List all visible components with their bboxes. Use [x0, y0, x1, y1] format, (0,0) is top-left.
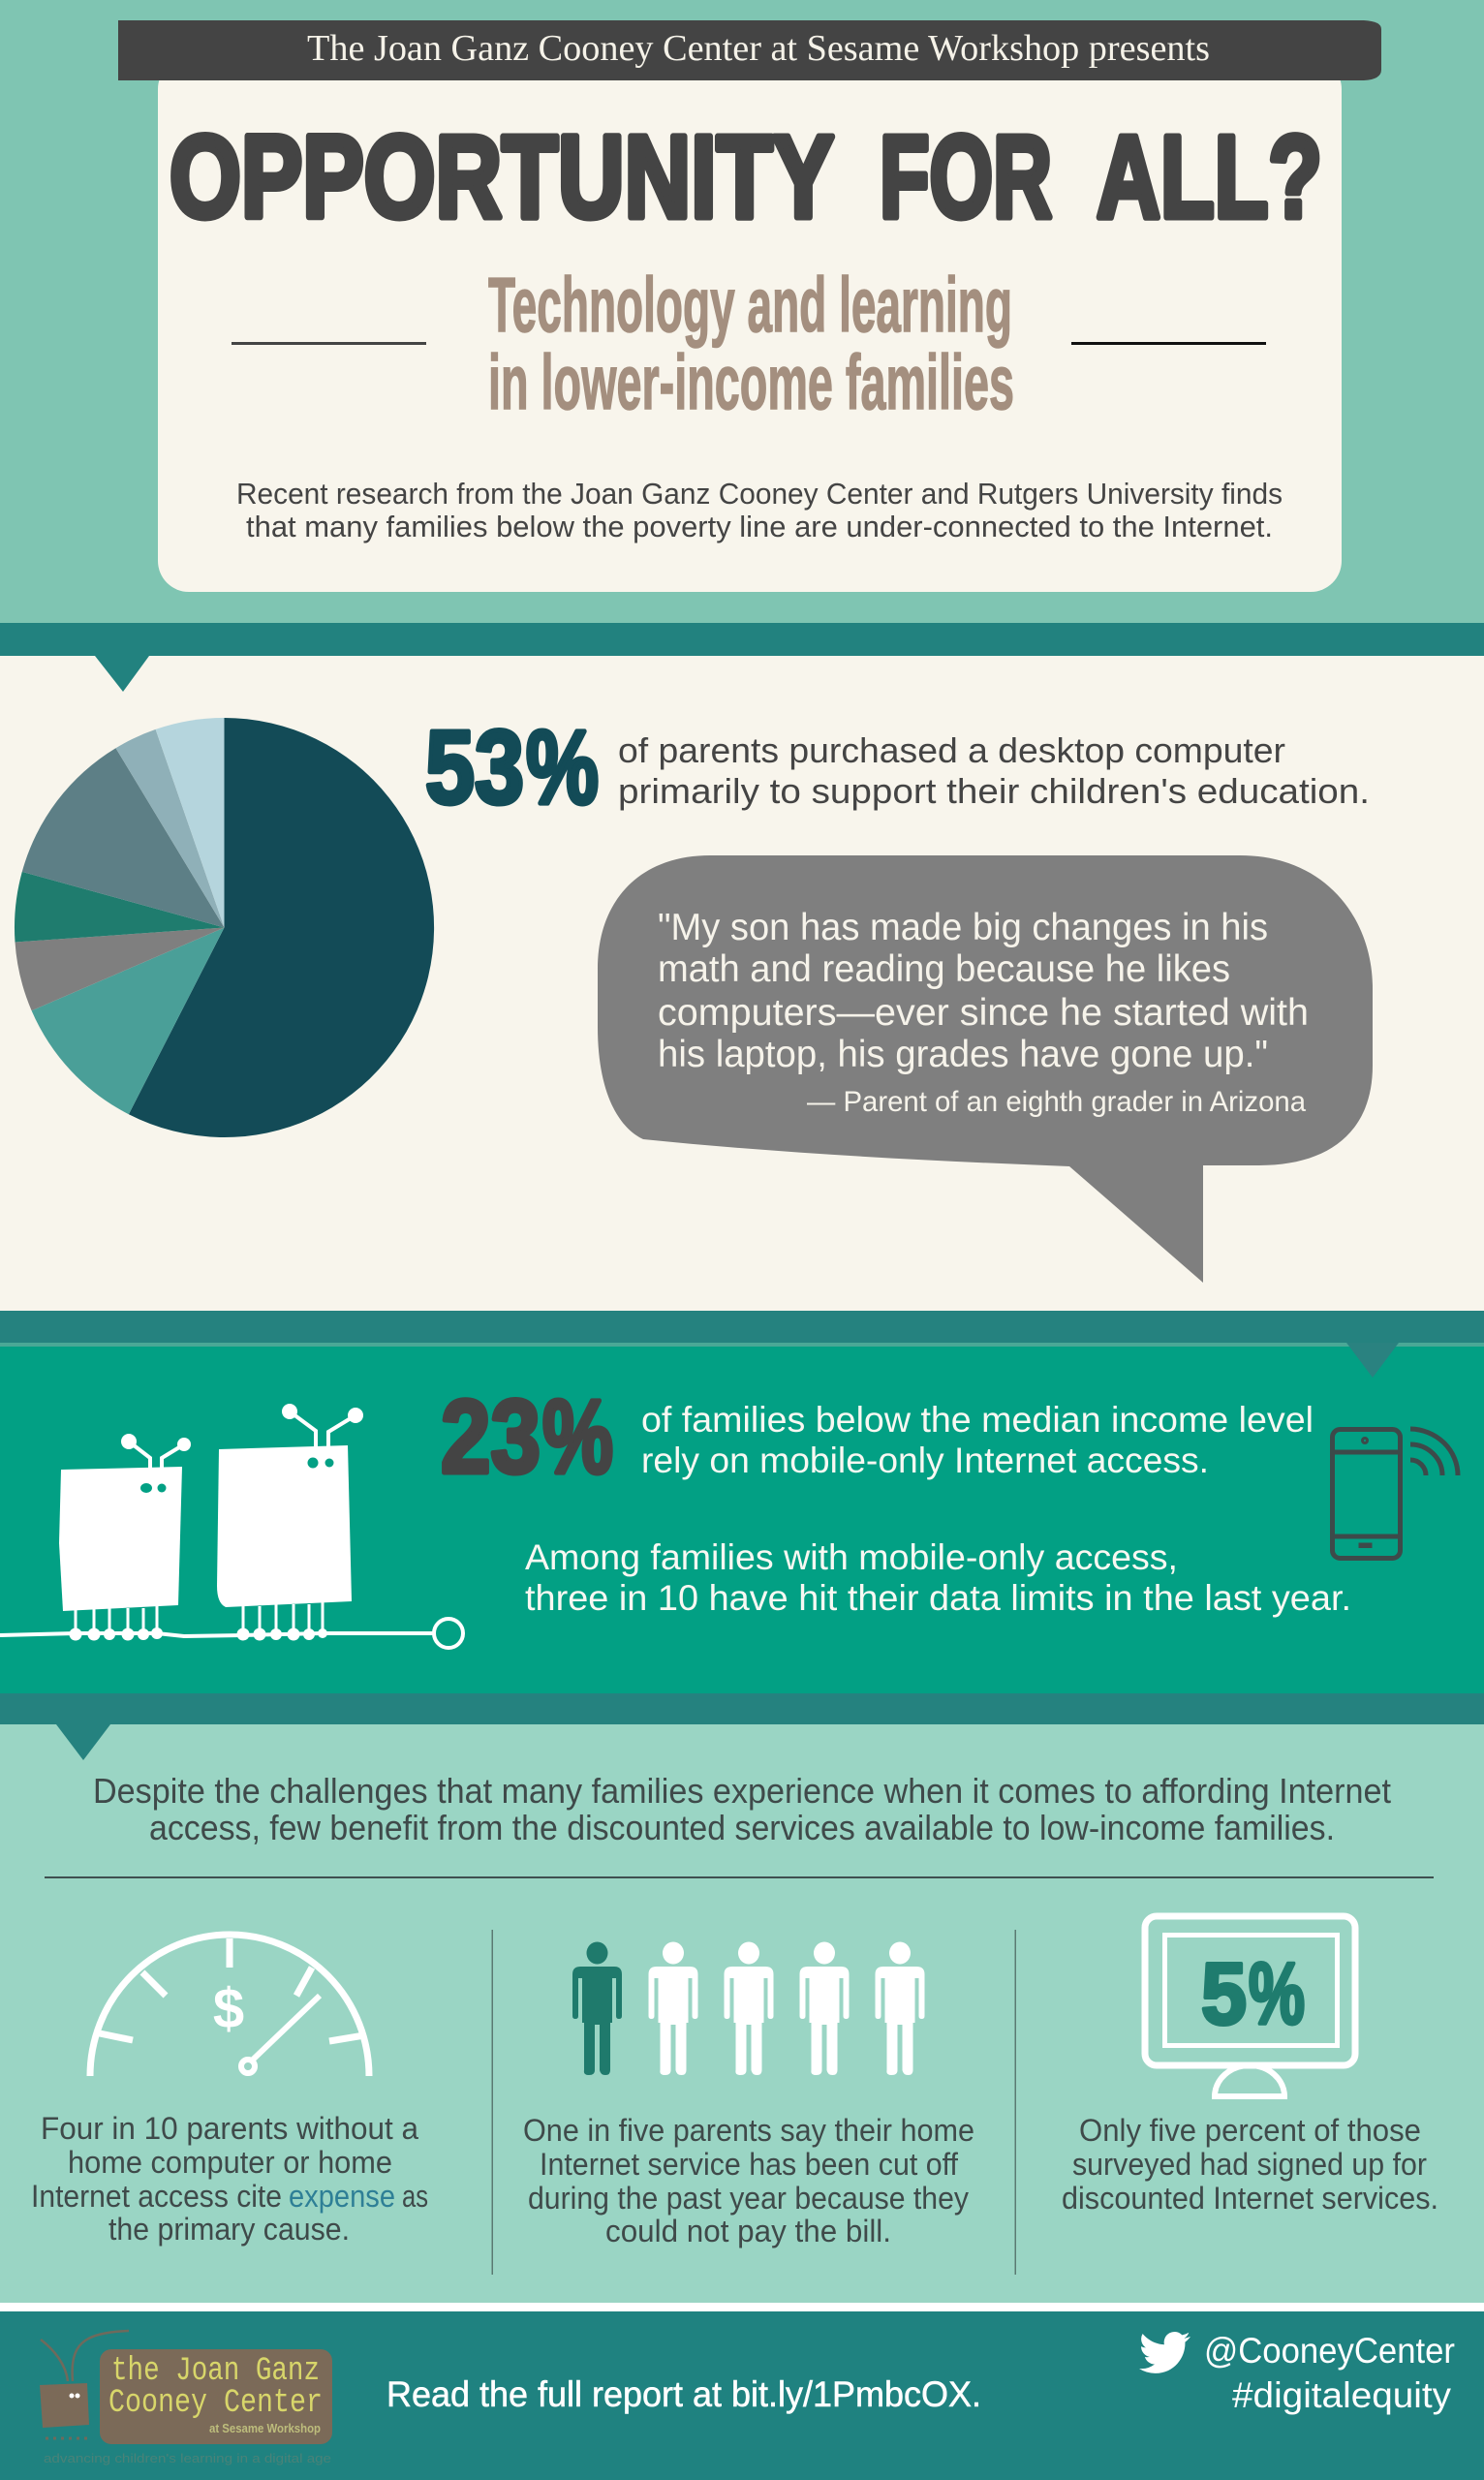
column 3 text: surveyed had signed up for [1072, 2147, 1427, 2182]
column 1 text: as [402, 2179, 428, 2214]
panel: desktop statistic [0, 656, 1484, 1312]
column 1 text: Internet access cite [31, 2179, 282, 2214]
pointer [1346, 1343, 1399, 1378]
logo: the Joan Ganz [111, 2353, 320, 2390]
column 1 text: home computer or home [68, 2145, 392, 2180]
statistic text [618, 730, 1370, 811]
section intro text: Despite the challenges that many families experience when it comes to affording Internet [93, 1771, 1391, 1811]
icon: expense gauge: $ [213, 1977, 244, 2040]
panel: mobile statistic [0, 1311, 1484, 1693]
person white [649, 1941, 697, 2075]
column 2 text: during the past year because they [528, 2181, 969, 2216]
intro text: Recent research from the Joan Ganz Cooney Center and Rutgers University finds [236, 477, 1283, 511]
mobile statistic text: three in 10 have hit their data limits in the last year. [525, 1578, 1351, 1618]
column 2 text: Internet service has been cut off [540, 2147, 958, 2182]
title: FOR [880, 110, 1052, 242]
social handles: @CooneyCenter [1204, 2331, 1455, 2371]
quote text: his laptop, his grades have gone up." [658, 1034, 1268, 1075]
big number 23%: 23 [441, 1378, 541, 1495]
title: ALL? [1097, 110, 1322, 242]
subtitle [488, 262, 1014, 425]
icon: twitter bird [1139, 2332, 1190, 2373]
person white [876, 1941, 924, 2075]
column 1 text: the primary cause. [108, 2212, 350, 2247]
pointer: first section [0, 623, 1484, 692]
column 3 text: discounted Internet services. [1062, 2181, 1438, 2216]
person white [725, 1941, 773, 2075]
logo: at Sesame Workshop [209, 2421, 321, 2435]
column 2 text: could not pay the bill. [605, 2214, 891, 2248]
icon: row of five people [572, 1941, 924, 2075]
quote text: — Parent of an eighth grader in Arizona [807, 1086, 1306, 1118]
statistic text: primarily to support their children's education. [618, 771, 1370, 811]
quote text: computers—ever since he started with [658, 992, 1309, 1034]
pointer [56, 1724, 110, 1760]
intro text: that many families below the poverty line are under-connected to the Internet. [246, 510, 1273, 543]
logo: advancing children's learning in a digital age [44, 2451, 331, 2465]
statistic text: of parents purchased a desktop computer [618, 730, 1285, 770]
big number 53%: 53 [425, 708, 524, 825]
logo robot icon [40, 2331, 129, 2438]
subtitle: in lower-income families [488, 339, 1014, 425]
big number 53%: % [526, 708, 599, 825]
big number 23%: % [542, 1378, 613, 1495]
panel: footer [0, 2311, 1484, 2480]
quote text [658, 907, 1309, 1118]
panel: discounted services [0, 1693, 1484, 2303]
robots illustration [0, 1404, 463, 1648]
big number 53% [425, 708, 599, 825]
title: OPPORTUNITY [170, 110, 834, 242]
speech bubble quote [598, 855, 1373, 1283]
icon: monitor showing 5%: 5 [1201, 1946, 1247, 2043]
column 1 text: Four in 10 parents without a [41, 2111, 418, 2146]
mobile statistic text: Among families with mobile-only access, [525, 1537, 1178, 1577]
social handles: #digitalequity [1232, 2375, 1452, 2415]
column 1 text [31, 2111, 428, 2247]
big number 23% [441, 1378, 613, 1495]
mobile statistic text: rely on mobile-only Internet access. [641, 1441, 1209, 1480]
icon: monitor showing 5%: % [1249, 1946, 1305, 2043]
subtitle: Technology and learning [488, 262, 1012, 348]
column 2 text: One in five parents say their home [523, 2113, 974, 2148]
column 2 text [523, 2113, 974, 2248]
section intro text [93, 1771, 1391, 1847]
mobile statistic text [525, 1400, 1351, 1618]
person white [800, 1941, 849, 2075]
banner text: The Joan Ganz Cooney Center at Sesame Workshop presents [307, 28, 1210, 69]
pie chart [15, 718, 434, 1137]
social handles [1204, 2331, 1455, 2415]
quote text: "My son has made big changes in his [658, 907, 1268, 948]
section intro text: access, few benefit from the discounted services available to low-income families. [149, 1808, 1335, 1847]
quote text: math and reading because he likes [658, 948, 1230, 990]
intro text [236, 477, 1283, 543]
icon: expense gauge [90, 1935, 369, 2076]
icon: monitor showing 5% [1145, 1916, 1355, 2096]
column 3 text [1062, 2113, 1438, 2216]
call to action: Read the full report at bit.ly/1PmbcOX. [386, 2374, 981, 2414]
banner [118, 20, 1381, 80]
mobile statistic text: of families below the median income level [641, 1400, 1314, 1440]
column 1 text: expense [289, 2179, 395, 2214]
column 3 text: Only five percent of those [1079, 2113, 1421, 2148]
icon: phone with signal [1333, 1429, 1458, 1558]
logo: Cooney Center [108, 2385, 323, 2422]
logo [40, 2331, 332, 2465]
person highlighted [572, 1941, 622, 2075]
panel: header card [118, 20, 1381, 592]
